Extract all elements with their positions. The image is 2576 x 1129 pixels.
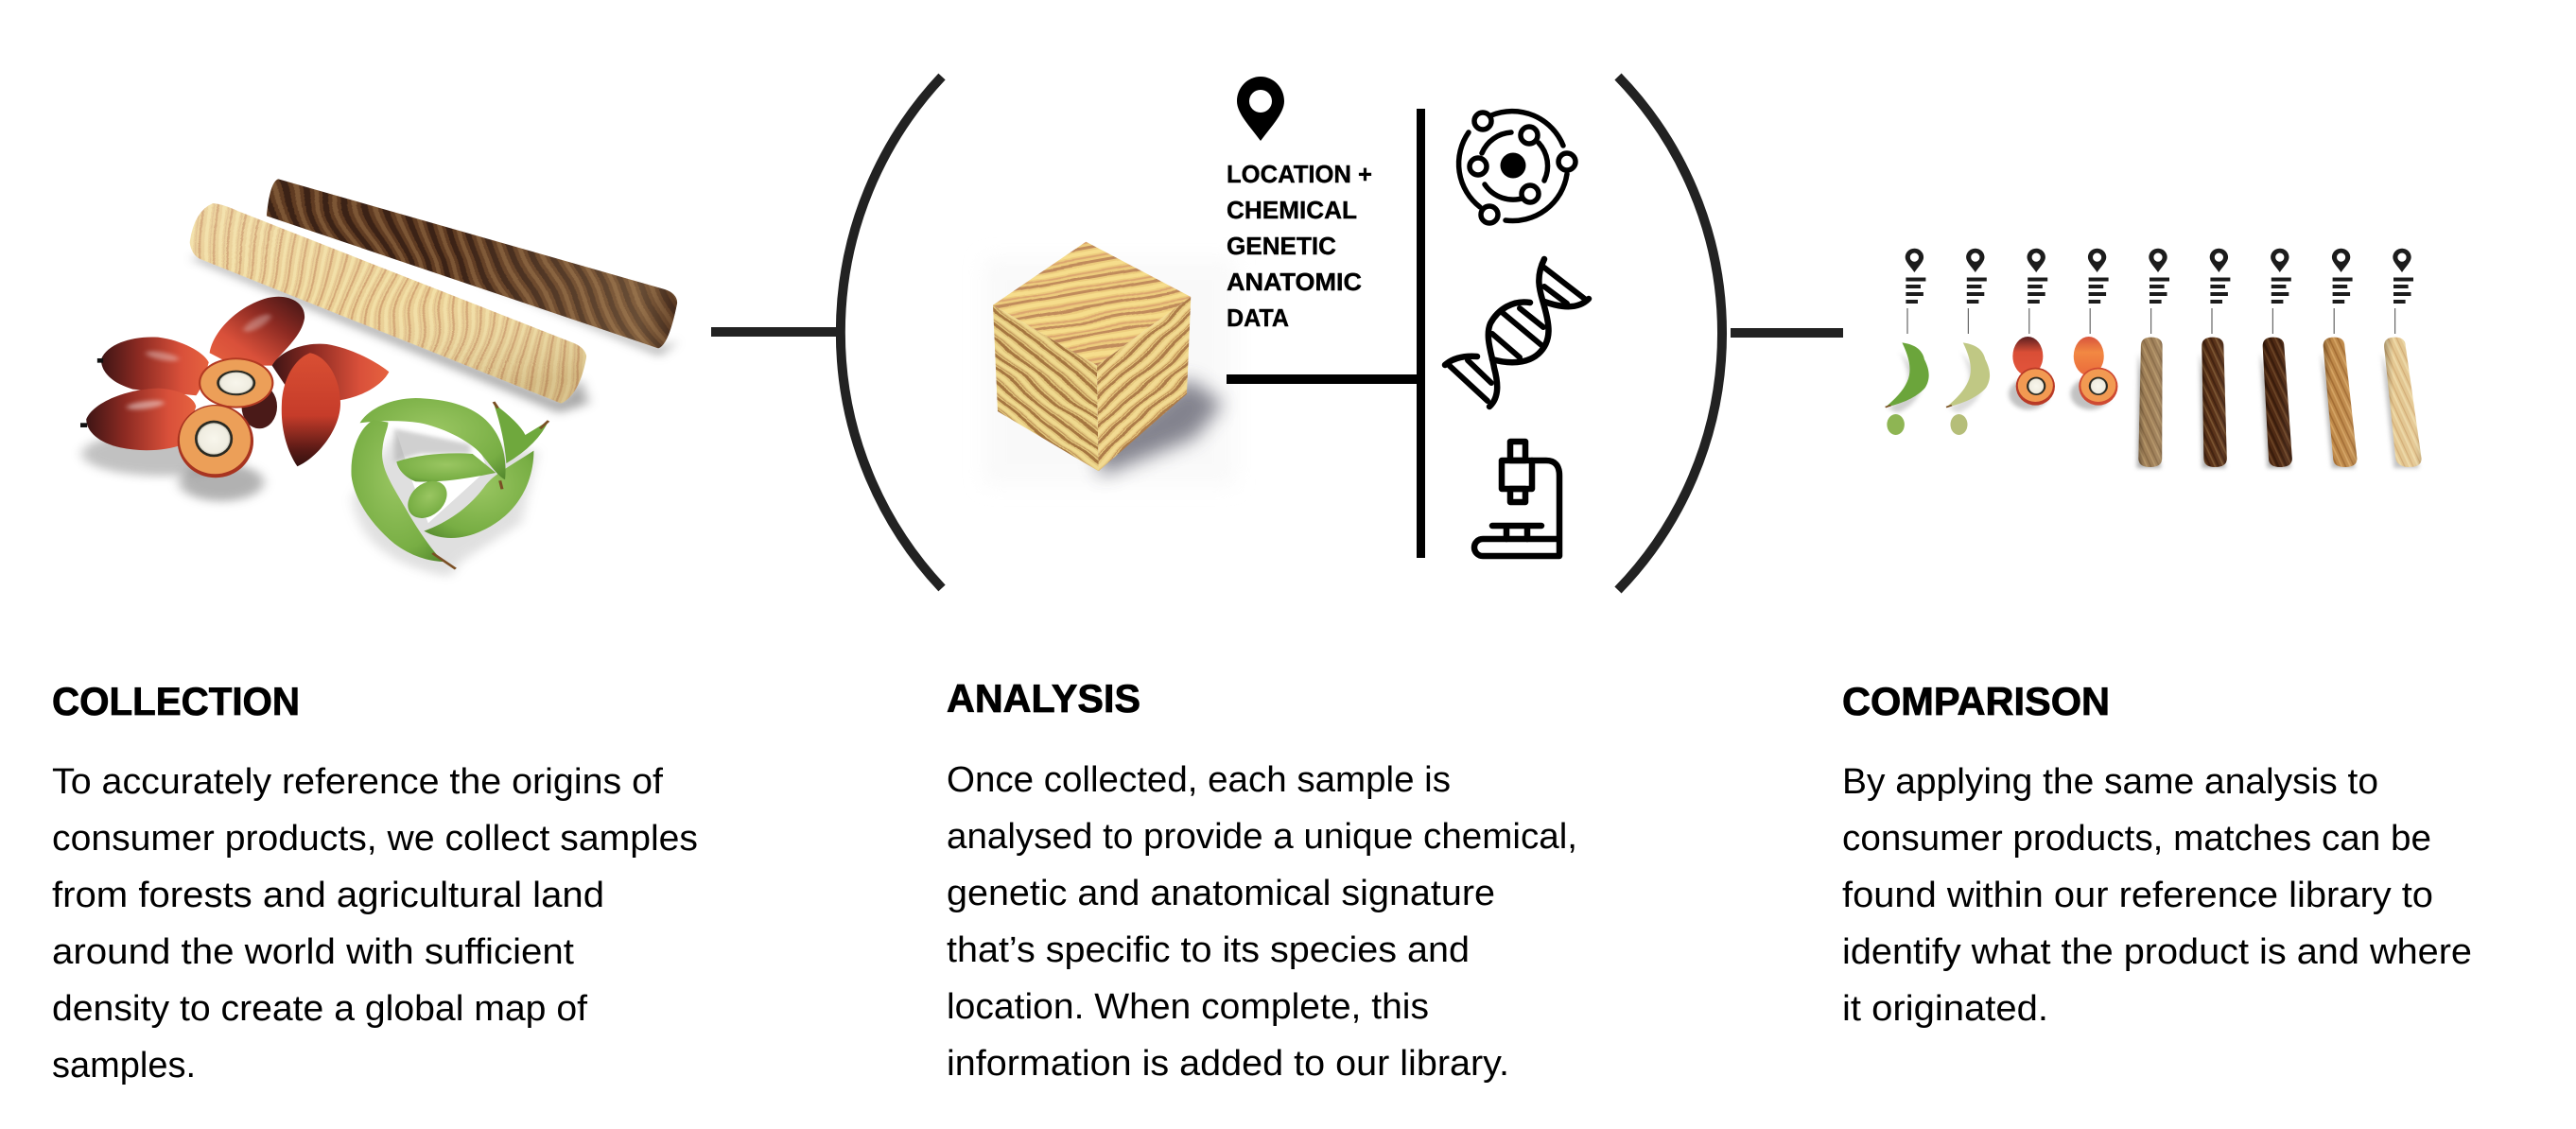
data list text: ANATOMIC bbox=[1227, 268, 1362, 296]
icon: location pin bbox=[1237, 77, 1284, 141]
horizontal connector to divider bbox=[1227, 374, 1418, 384]
sample 2: pale pod bbox=[1946, 249, 1990, 435]
left bracket bbox=[841, 77, 942, 588]
body: analysis: information is added to our library. bbox=[947, 1044, 1509, 1084]
sample 3: dark palm fruit bbox=[2009, 249, 2055, 409]
body: analysis: genetic and anatomical signature bbox=[947, 874, 1495, 913]
data list text: CHEMICAL bbox=[1227, 196, 1357, 224]
body: analysis: Once collected, each sample is bbox=[947, 760, 1451, 800]
sample 9: pale wood bbox=[2382, 249, 2422, 468]
body: analysis: that’s specific to its species and bbox=[947, 930, 1470, 970]
body: comparison: identify what the product is and where bbox=[1842, 932, 2472, 972]
sample marker bbox=[2028, 249, 2047, 334]
cube top face bbox=[993, 242, 1191, 365]
heading: comparison: COMPARISON bbox=[1842, 679, 2110, 723]
sample 1: green pod bbox=[1886, 249, 1929, 435]
sample 7: very dark wood bbox=[2260, 249, 2292, 468]
sample marker bbox=[2210, 249, 2230, 334]
text block: comparison bbox=[1842, 679, 2472, 1029]
body: collection: density to create a global map of bbox=[52, 989, 587, 1029]
body: collection: from forests and agricultural land bbox=[52, 876, 604, 915]
body: comparison: found within our reference library to bbox=[1842, 876, 2433, 915]
connector: collection to analysis bbox=[711, 327, 838, 337]
text block: analysis bbox=[947, 676, 1577, 1084]
body: comparison: it originated. bbox=[1842, 989, 2048, 1029]
body: analysis: location. When complete, this bbox=[947, 987, 1429, 1027]
edamame pods bbox=[351, 398, 548, 577]
sample marker bbox=[2393, 249, 2413, 334]
body: collection: consumer products, we collect samples bbox=[52, 819, 698, 859]
body: collection bbox=[52, 762, 698, 1086]
body: comparison: consumer products, matches can be bbox=[1842, 819, 2431, 859]
text block: collection bbox=[52, 679, 698, 1086]
icon: DNA helix bbox=[1445, 259, 1589, 407]
panel: comparison samples bbox=[1886, 249, 2422, 468]
sample marker bbox=[2149, 249, 2169, 334]
sample marker bbox=[1966, 249, 1987, 334]
dark wood log bbox=[267, 179, 677, 348]
body: collection: around the world with sufficient bbox=[52, 932, 574, 972]
heading: collection: COLLECTION bbox=[52, 679, 300, 723]
right bracket bbox=[1618, 77, 1722, 590]
data list text: GENETIC bbox=[1227, 232, 1336, 260]
body: analysis: analysed to provide a unique chemical, bbox=[947, 817, 1577, 857]
light wood log bbox=[189, 203, 586, 403]
body: collection: samples. bbox=[52, 1046, 196, 1086]
sample marker bbox=[2271, 249, 2291, 334]
data list text: DATA bbox=[1227, 304, 1289, 332]
cube right face bbox=[1097, 297, 1192, 471]
sample marker bbox=[2088, 249, 2109, 334]
body: comparison bbox=[1842, 762, 2472, 1029]
data list text bbox=[1227, 160, 1372, 332]
sample 6: dark wood bbox=[2200, 249, 2230, 468]
sample marker bbox=[1906, 249, 1925, 334]
icon: microscope bbox=[1474, 442, 1559, 556]
sample 5: mid-brown wood bbox=[2137, 249, 2169, 468]
body: comparison: By applying the same analysis to bbox=[1842, 762, 2378, 802]
panel: collection illustration bbox=[80, 164, 711, 577]
wood cube sample bbox=[993, 242, 1233, 486]
body: collection: To accurately reference the origins of bbox=[52, 762, 663, 802]
cube shadow bbox=[1097, 378, 1223, 476]
icon: chemical atom bbox=[1459, 112, 1575, 223]
connector: analysis to comparison bbox=[1731, 328, 1843, 338]
palm fruit cluster bbox=[80, 297, 389, 501]
heading: analysis: ANALYSIS bbox=[947, 676, 1140, 721]
vertical divider bbox=[1417, 109, 1425, 558]
wood log shadows bbox=[192, 255, 677, 413]
cube left face bbox=[993, 304, 1099, 471]
sample 8: amber wood bbox=[2321, 249, 2357, 468]
data list text: LOCATION + bbox=[1227, 160, 1372, 188]
sample 4: bright palm fruit bbox=[2070, 249, 2117, 409]
cube halo bbox=[983, 258, 1236, 485]
sample marker bbox=[2332, 249, 2353, 334]
body: analysis bbox=[947, 760, 1577, 1084]
